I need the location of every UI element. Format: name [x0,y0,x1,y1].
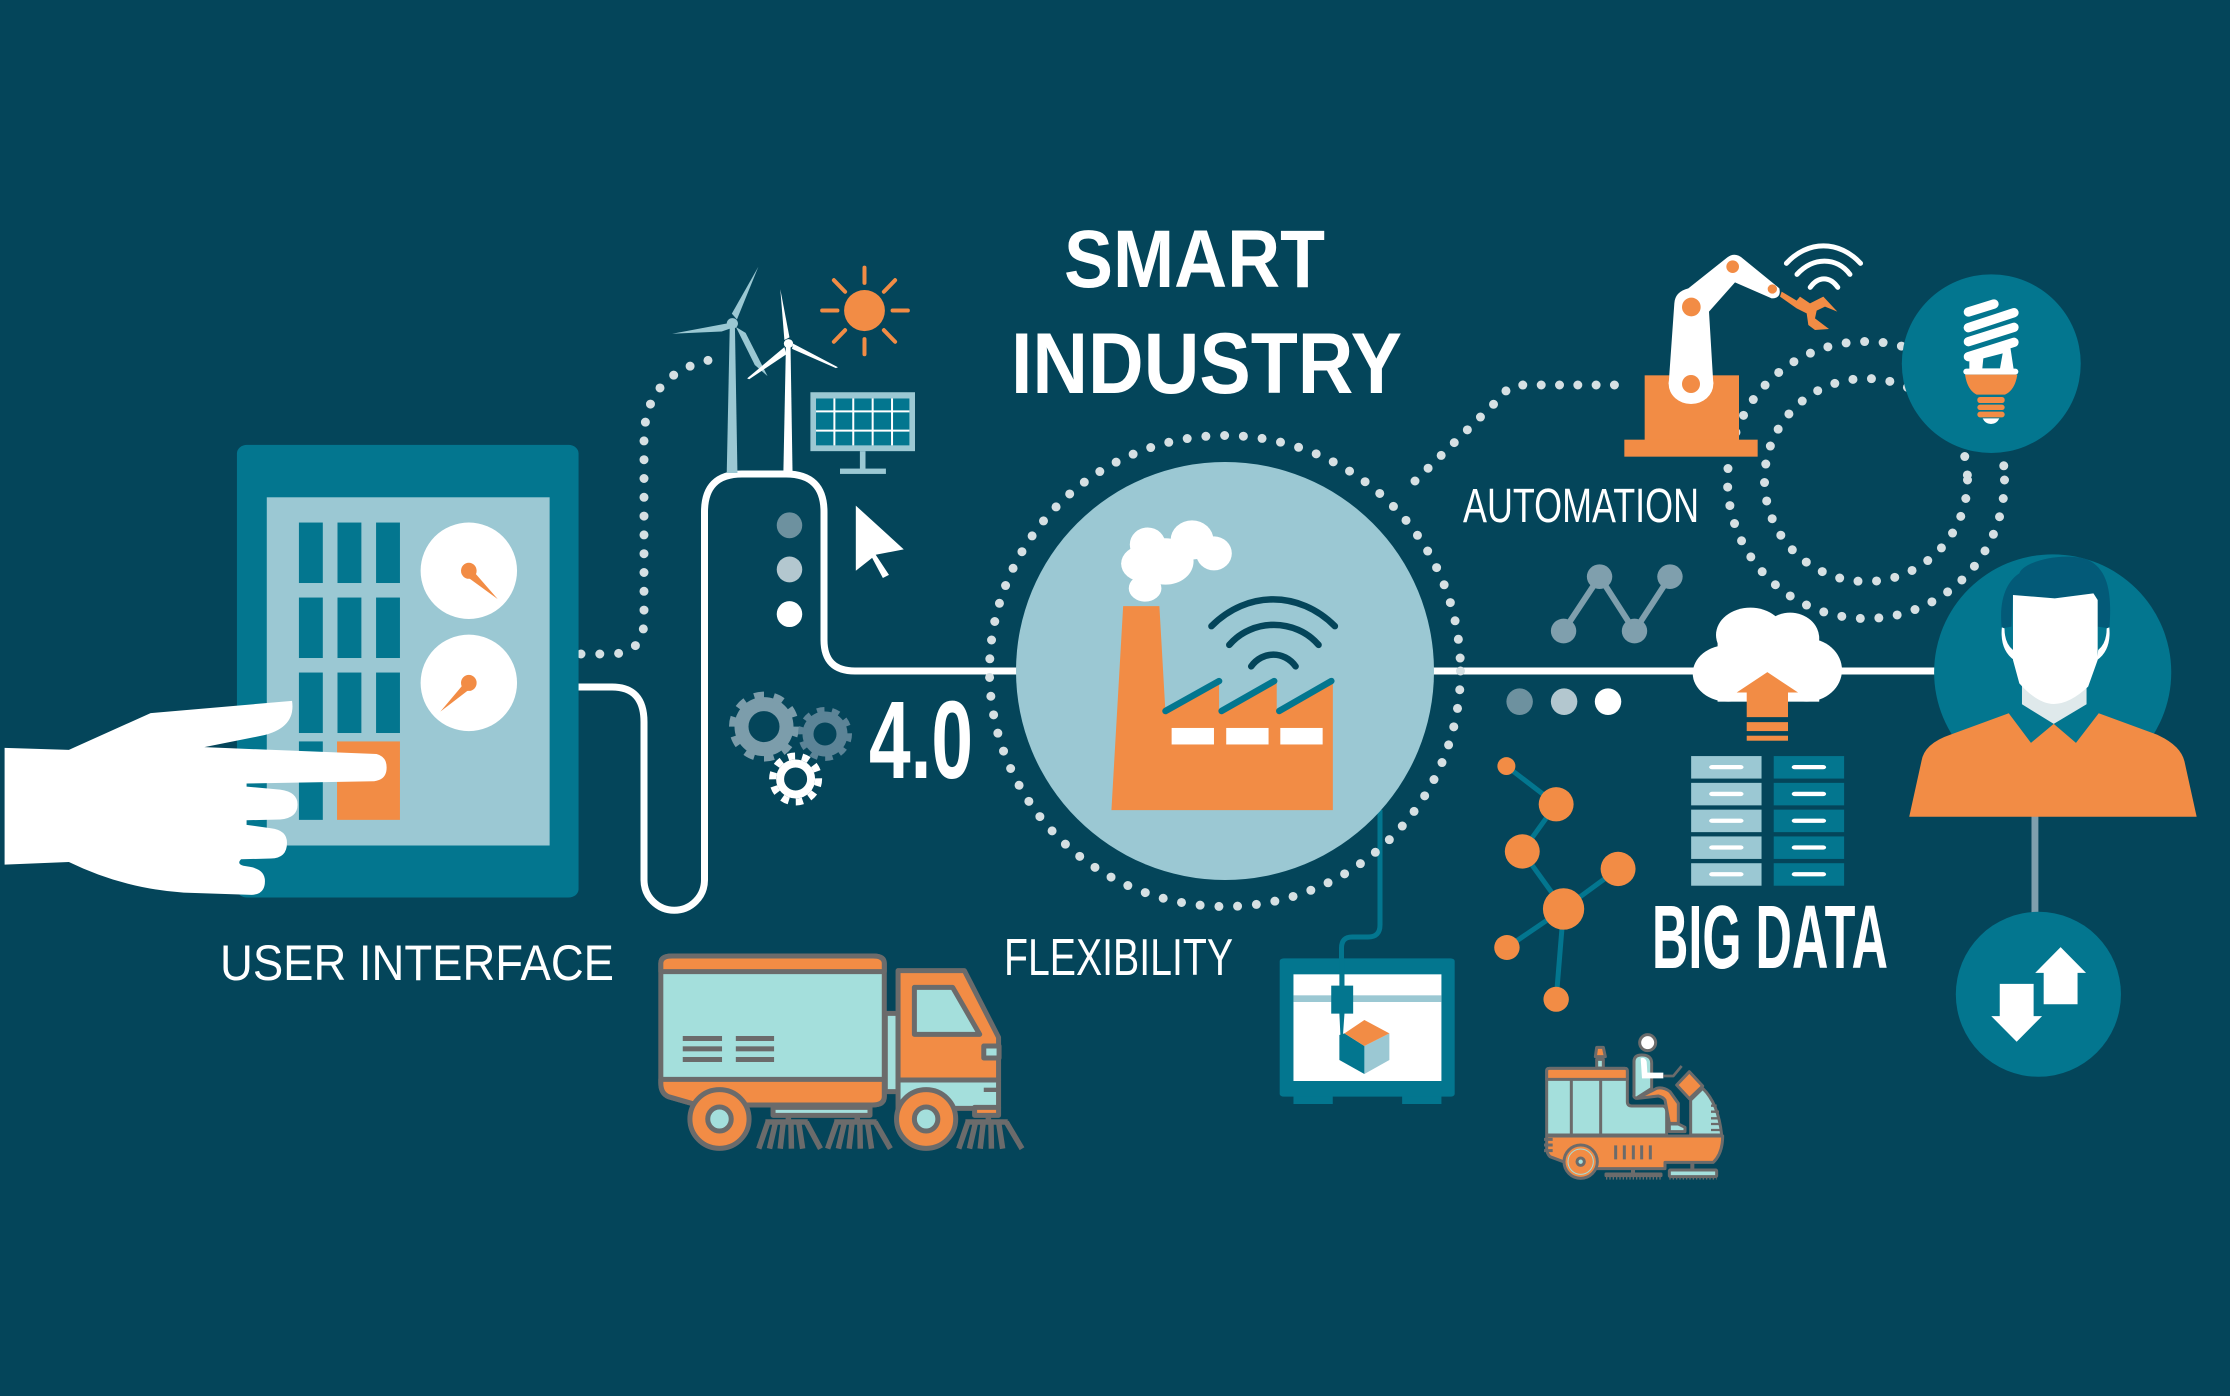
ears [2002,627,2110,660]
front wind turbine [747,289,838,473]
molecule network [1494,757,1636,1012]
truck bottom band [661,1079,884,1105]
robot arm wifi [1786,246,1861,287]
robot arm links [1669,255,1780,404]
face [2013,593,2098,704]
sweeper hood [1677,1072,1722,1135]
gear medium [801,710,849,758]
sun [822,268,908,354]
printed cube [1339,1020,1389,1074]
person circle [1934,554,2171,790]
robot gripper [1780,292,1837,330]
truck top band [661,956,884,972]
arrows circle [1956,912,2121,1077]
gear large [733,696,795,758]
cloud [1693,608,1842,702]
factory roof [1166,681,1331,711]
brushes [759,1115,1022,1149]
orange pressed button [337,741,400,820]
truck connector [885,1013,898,1092]
printer frame [1280,958,1455,1097]
label: 4.0: 4.0 [869,679,973,802]
title: INDUSTRY [1011,316,1402,412]
printer feet [1293,1093,1333,1104]
teal wire: factory to 3D printer [1342,810,1380,965]
line chart icon [1551,564,1683,643]
outer dotted ring [1728,342,2004,618]
person hair [2001,557,2110,628]
inner dotted ring [1764,378,1968,582]
dotted connector: factory to robot [1415,385,1616,481]
truck box [661,956,884,1105]
icon: 3D printer [1280,958,1455,1104]
tablet body [237,445,579,898]
button grid [299,523,400,820]
truck vents [683,1036,774,1062]
database blocks [1691,756,1844,886]
sweeper cabin [1547,1068,1667,1135]
bulb spiral [1968,304,2014,357]
printer rail [1293,995,1441,1002]
bulb base [1965,375,2017,395]
cloud upload arrow [1737,672,1798,741]
panel: person and data [1494,672,2197,1077]
person neck [2022,674,2087,724]
tablet screen [267,497,550,846]
driver [1634,1035,1685,1132]
printer window [1293,974,1441,1081]
robot joints [1682,260,1777,393]
panel: energy and controls [672,267,915,627]
dotted connector: tablet to turbines [581,358,720,654]
bumper notch [984,1088,999,1092]
beacon [1595,1047,1605,1068]
label: big data: BIG DATA [1652,888,1888,988]
hand pointing [5,701,387,895]
wire and nozzle [1331,958,1353,1035]
sweeper body [1544,1136,1723,1169]
label: flexibility: FLEXIBILITY [1004,929,1233,987]
back wind turbine [672,267,768,473]
truck cab lower [898,1080,999,1108]
gauge top [421,523,517,619]
bulb circle [1902,274,2081,453]
title [1011,214,1402,412]
icon: street sweeper truck [661,956,1022,1149]
white line: factory to user [1420,668,1940,674]
label: user interface: USER INTERFACE [220,935,614,991]
smoke cloud [1121,520,1232,602]
cab window [914,987,980,1034]
headlight [984,1046,999,1058]
person shirt [1909,713,2197,817]
sweeper wheel [1564,1145,1597,1178]
panel: automation icons [1506,246,2171,790]
main factory circle [1016,462,1434,880]
panel: user interface tablet [5,445,579,898]
person face [2002,593,2110,704]
factory windows [1172,728,1323,744]
bulb neck [1969,345,2014,372]
title: SMART [1064,214,1325,305]
dotted ring around factory [990,436,1460,906]
icon: light bulb [1963,304,2018,424]
label: automation: AUTOMATION [1463,480,1699,533]
wheels [690,1090,956,1148]
cursor arrow [856,506,904,578]
icon: factory [1111,520,1335,810]
up and down arrows [1991,947,2086,1042]
wifi signal [1211,599,1335,666]
connector stem [2032,815,2038,915]
gauge bottom [421,635,517,731]
sweeper brushes [1606,1162,1717,1178]
status dots right [1506,688,1621,715]
status dots [777,512,802,627]
robot base [1624,375,1758,457]
solar panel [810,392,915,474]
icon: floor sweeper [1544,1035,1723,1178]
truck cab [898,971,999,1080]
gear small white [773,756,819,802]
factory building [1111,606,1333,810]
sweeper mount [773,1107,870,1115]
icon: robot arm [1624,255,1837,457]
bulb tip [1983,418,1999,424]
gears [733,696,849,802]
bulb threads [1977,397,2005,417]
white cable: tablet to factory [578,474,1030,910]
